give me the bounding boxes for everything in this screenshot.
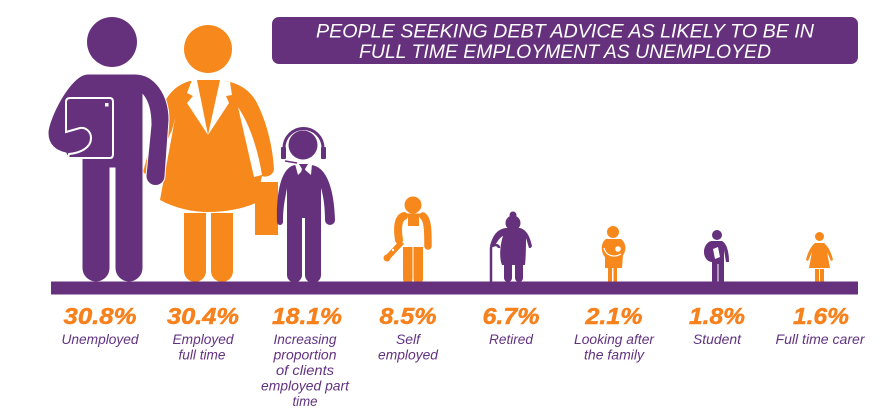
stat: student (689, 303, 745, 347)
icon: tablet outline (66, 98, 113, 158)
stat: looking after the family (574, 303, 655, 362)
stat: employed full time: full time (178, 346, 226, 362)
stat: retired (482, 303, 540, 347)
stat: employed part time: proportion (273, 346, 337, 362)
icon: looking after the family (602, 226, 625, 282)
icon: full time carer (806, 232, 833, 282)
stat: retired: Retired (489, 331, 534, 347)
stat: full time carer (776, 303, 866, 347)
stat: self employed: Self (396, 331, 422, 347)
stat: unemployed: Unemployed (62, 331, 140, 347)
icon: student with backpack (704, 230, 729, 282)
stat: employed part time: Increasing (274, 331, 337, 347)
stat: student: Student (693, 331, 742, 347)
stat: looking after the family: Looking after (574, 331, 655, 347)
stat: looking after the family: 2.1% (584, 303, 642, 329)
stat: employed part time: time (292, 393, 318, 409)
panel: headline banner: PEOPLE SEEKING DEBT ADVICE AS LIKELY TO BE IN (316, 20, 815, 42)
stat: self employed: 8.5% (380, 303, 436, 329)
stat: employed full time (167, 303, 239, 362)
ground bar (51, 282, 858, 294)
icon: unemployed man with tablet (48, 17, 169, 282)
stat: self employed: employed (378, 346, 439, 362)
stat: full time carer: 1.6% (793, 303, 849, 329)
stat: looking after the family: the family (584, 346, 645, 362)
stat: employed part time: employed part (261, 378, 350, 394)
stat: retired: 6.7% (482, 303, 540, 329)
stat: employed part time (261, 303, 350, 409)
panel: headline banner: FULL TIME EMPLOYMENT AS UNEMPLOYED (359, 41, 771, 63)
stat: self employed (378, 303, 439, 362)
stat: employed part time: 18.1% (272, 303, 342, 329)
stat: employed full time: Employed (172, 331, 235, 347)
panel: headline banner (272, 17, 858, 64)
stat: employed part time: of clients (276, 362, 334, 378)
stat: student: 1.8% (689, 303, 745, 329)
stat: unemployed (62, 303, 140, 347)
icon: employed full time woman (143, 25, 278, 282)
icon: briefcase (255, 182, 278, 235)
stat: full time carer: Full time carer (776, 331, 866, 347)
icon: retired woman with cane (490, 212, 532, 282)
stat: employed full time: 30.4% (167, 303, 239, 329)
icon: part-time call centre worker (277, 129, 335, 283)
stat: unemployed: 30.8% (64, 303, 136, 329)
icon: self employed worker with wrench (384, 196, 428, 284)
